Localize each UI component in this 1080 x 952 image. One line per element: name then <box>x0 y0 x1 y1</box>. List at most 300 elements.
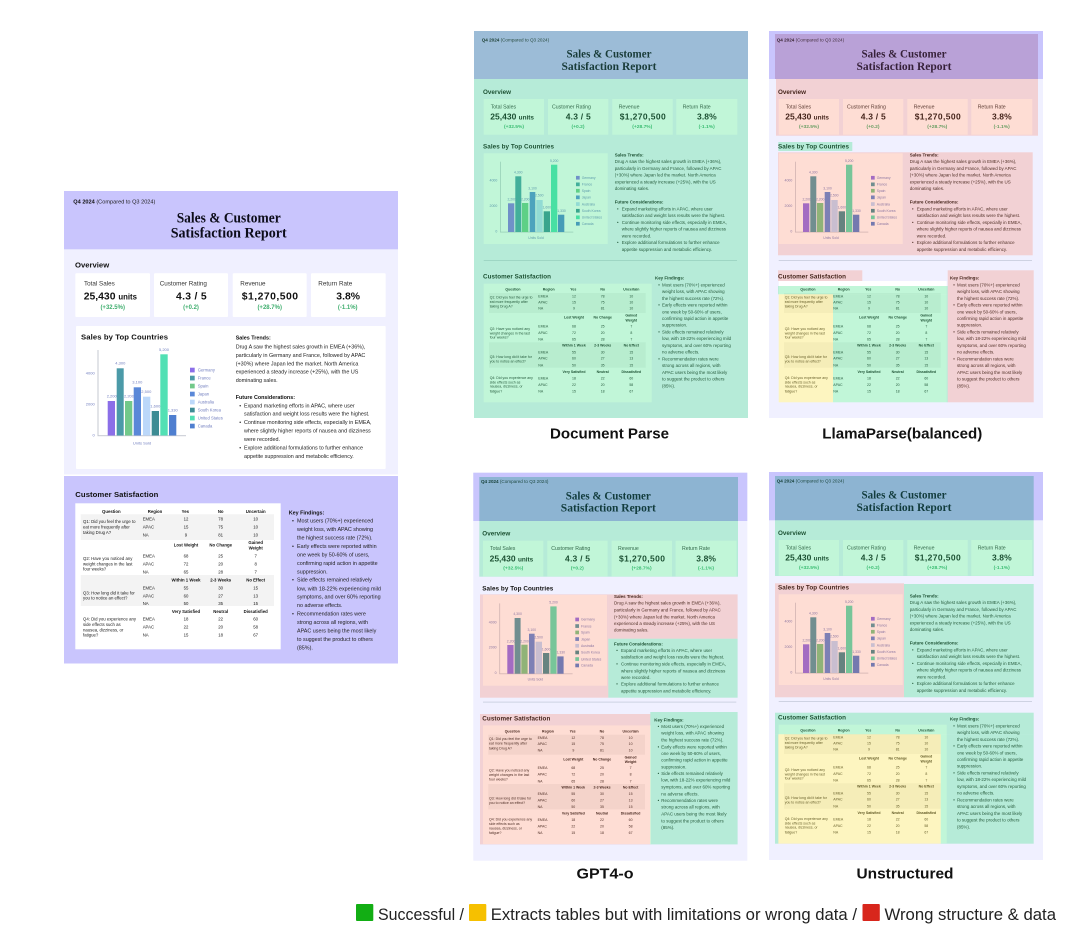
KPI cards: 4.3 / 5 <box>565 553 590 563</box>
bar chart <box>483 595 607 686</box>
satisfaction table: 22 <box>218 617 224 622</box>
satisfaction table: No Change <box>888 757 907 761</box>
future considerations text: • <box>912 647 914 652</box>
satisfaction table: 13 <box>924 357 928 361</box>
date line: Q4 2024 (Compared to Q3 2024) <box>777 478 845 483</box>
KPI cards: (+0.2) <box>867 565 880 571</box>
satisfaction table: 18 <box>572 376 576 380</box>
satisfaction table: EMEA <box>538 324 549 328</box>
bar chart: Units Sold <box>528 236 544 240</box>
satisfaction table: 81 <box>896 748 900 752</box>
report title <box>561 488 656 515</box>
sales trends text: experienced a steady increase (+25%), with the US <box>236 370 359 376</box>
bar chart: 2,500 <box>830 635 839 639</box>
satisfaction table: 50 <box>867 804 871 808</box>
satisfaction table: nausea, dizziness, or <box>83 627 124 632</box>
satisfaction table: 35 <box>896 363 900 367</box>
satisfaction table: 27 <box>218 593 224 598</box>
header band <box>474 31 748 79</box>
key findings text: low, with 18-22% experiencing mild <box>957 777 1027 782</box>
satisfaction table: Q2: Have you noticed any <box>785 327 825 331</box>
satisfaction table: 20 <box>600 773 604 777</box>
key findings text <box>655 276 732 388</box>
future considerations text: where slightly higher reports of nausea and dizziness <box>917 668 1022 673</box>
satisfaction table: 15 <box>571 831 575 835</box>
KPI cards: (+0.2) <box>571 566 584 572</box>
satisfaction table: Question <box>800 288 816 292</box>
bar chart: 4,300 <box>809 611 818 615</box>
satisfaction table: fatigue? <box>489 831 502 835</box>
satisfaction table: Neutral <box>596 812 608 816</box>
bar chart: 4000 <box>490 179 497 183</box>
key findings text: low, with 18-22% experiencing mild <box>297 586 381 592</box>
key findings text: (85%). <box>661 825 674 830</box>
sales trends text: particularly in Germany and France, followed by APAC <box>910 166 1017 171</box>
future considerations text: were recorded. <box>917 233 946 238</box>
satisfaction table: 15 <box>184 524 189 529</box>
report date line: Q4 2024 (Compared to Q3 2024) <box>73 199 156 205</box>
key findings text: suppression. <box>957 323 982 328</box>
page background <box>769 31 1043 418</box>
panel: Unstructured result <box>769 472 1043 860</box>
satisfaction table: 60 <box>572 357 576 361</box>
KPI cards: Customer Rating <box>551 546 590 552</box>
bar chart: 2,200 <box>520 639 529 643</box>
KPI cards <box>779 540 1032 576</box>
satisfaction table: 25 <box>896 765 900 769</box>
satisfaction table: APAC <box>538 742 547 746</box>
satisfaction table: Neutral <box>597 370 609 374</box>
satisfaction table: nausea, dizziness, or <box>490 385 523 389</box>
satisfaction table: Dissatisfied <box>621 370 641 374</box>
satisfaction table: NA <box>143 532 149 537</box>
report title: Sales & Customer <box>862 488 947 502</box>
bar chart: Units Sold <box>823 677 839 681</box>
future considerations text: • <box>912 240 914 245</box>
satisfaction table: 50 <box>572 363 576 367</box>
bar chart: South Korea <box>877 650 896 654</box>
satisfaction table: side effects such as <box>785 821 816 825</box>
sales trends text: particularly in Germany and France, followed by APAC <box>910 607 1017 612</box>
satisfaction table: 25 <box>896 324 900 328</box>
key findings text: • <box>658 282 660 287</box>
bar chart: 5,200 <box>550 159 559 163</box>
legend <box>356 904 1057 924</box>
key findings text: no adverse effects. <box>661 791 699 796</box>
satisfaction table: Lost Weight <box>859 316 880 320</box>
key findings text: Side effects remained relatively <box>957 770 1019 775</box>
bar chart: sales by country: Australia <box>198 400 215 404</box>
satisfaction table: Region <box>542 729 554 733</box>
future considerations text: were recorded. <box>917 674 946 679</box>
bar chart: sales by country: 2000 <box>86 401 95 406</box>
satisfaction table: you to notice an effect? <box>785 359 821 363</box>
future considerations text: satisfaction and weight loss results were the highest. <box>917 654 1020 659</box>
key findings text: Side effects remained relatively <box>957 329 1019 334</box>
satisfaction table: you to notice an effect? <box>83 596 128 601</box>
KPI cards: Customer Rating <box>847 545 886 551</box>
satisfaction table: taking Drug A? <box>785 746 808 750</box>
key findings text: Key Findings: <box>289 510 325 516</box>
satisfaction table: NA <box>143 601 149 606</box>
key findings text: • <box>658 744 660 749</box>
key findings text: • <box>658 303 660 308</box>
satisfaction table: 28 <box>600 779 604 783</box>
satisfaction table: 10 <box>253 524 259 529</box>
satisfaction table: 2-3 Weeks <box>889 344 906 348</box>
satisfaction table: 50 <box>867 363 871 367</box>
satisfaction table: EMEA <box>538 818 548 822</box>
satisfaction table: 7 <box>925 765 927 769</box>
KPI cards: (+28.7%) <box>632 124 653 130</box>
bar chart: sales by country: 0 <box>92 432 95 437</box>
KPI cards: Total Sales <box>490 546 516 552</box>
satisfaction table: Yes <box>570 729 576 733</box>
key findings text: low, with 18-22% experiencing mild <box>661 778 731 783</box>
overview heading: Overview <box>482 531 510 538</box>
bar chart <box>484 153 608 244</box>
bar chart: sales by country: France <box>198 376 211 380</box>
key findings text: no adverse effects. <box>957 350 994 355</box>
key findings text: • <box>292 611 294 617</box>
satisfaction table: Q1: Did you feel the urge to <box>785 736 828 740</box>
satisfaction table: nausea, dizziness, or <box>785 826 818 830</box>
satisfaction table: 2-3 Weeks <box>593 785 611 789</box>
panel: Document Parse result <box>474 31 748 418</box>
satisfaction table <box>779 725 947 843</box>
satisfaction table: 72 <box>867 331 871 335</box>
satisfaction table: 22 <box>867 824 871 828</box>
overview heading: Overview <box>483 89 511 96</box>
future considerations text: Future Considerations: <box>910 641 959 646</box>
satisfaction table: 55 <box>571 792 575 796</box>
satisfaction table: NA <box>538 748 543 752</box>
satisfaction table: 2-3 Weeks <box>889 785 906 789</box>
future considerations text: • <box>617 206 619 211</box>
future considerations text <box>614 641 726 694</box>
satisfaction table: APAC <box>538 300 548 304</box>
overview KPI cards: (-1.1%) <box>338 305 358 311</box>
satisfaction table: 10 <box>629 300 633 304</box>
satisfaction table: 75 <box>601 300 605 304</box>
satisfaction table: 15 <box>867 741 871 745</box>
satisfaction table: 35 <box>218 601 224 606</box>
sales trends text: dominating sales. <box>236 378 278 384</box>
customer satisfaction section background <box>64 476 398 664</box>
overview KPI cards: 25,430 units <box>84 291 138 302</box>
satisfaction table: APAC <box>833 300 843 304</box>
key findings text: one week by 50-60% of users, <box>957 750 1017 755</box>
bar chart: Canada <box>582 222 594 226</box>
satisfaction table: 27 <box>600 798 604 802</box>
satisfaction table: 68 <box>571 766 575 770</box>
sales trends text <box>614 594 722 633</box>
satisfaction table: Very Satisfied <box>172 609 200 614</box>
satisfaction table: Yes <box>570 288 576 292</box>
key findings text: APAC users being the most likely <box>297 628 377 634</box>
satisfaction table: 10 <box>629 294 633 298</box>
bar chart: 1,600 <box>542 647 550 651</box>
satisfaction table: 68 <box>184 554 189 559</box>
satisfaction table: Within 1 Week <box>857 344 881 348</box>
key findings text: (85%). <box>297 645 313 651</box>
satisfaction table: Yes <box>865 729 871 733</box>
bar chart: Germany <box>582 176 596 180</box>
satisfaction table: Q1: Did you feel the urge to <box>785 295 828 299</box>
satisfaction table: eat more frequently after <box>489 742 528 746</box>
satisfaction table: 28 <box>896 338 900 342</box>
future considerations text: • <box>912 220 914 225</box>
bar chart: 3,100 <box>823 186 832 190</box>
satisfaction table: Q4: Did you experience any <box>489 818 532 822</box>
key findings text: suppression. <box>957 764 982 769</box>
satisfaction table: Yes <box>182 509 190 514</box>
satisfaction table: side effects such as <box>490 380 521 384</box>
key findings text: APAC users being the most likely <box>957 811 1023 816</box>
future considerations text: Expand marketing efforts in APAC, where user <box>917 206 1008 211</box>
satisfaction table: 10 <box>629 736 633 740</box>
key findings text: Most users (70%+) experienced <box>297 519 373 525</box>
satisfaction table: Lost Weight <box>564 316 585 320</box>
sales trends text: (+30%) where Japan led the market. North America <box>615 173 716 178</box>
bar chart: sales by country: 5,200 <box>159 347 170 352</box>
satisfaction table: Very Satisfied <box>562 812 585 816</box>
future considerations text: Explore additional formulations to further enhance <box>917 240 1015 245</box>
satisfaction table: 12 <box>867 294 871 298</box>
bar chart: Japan <box>581 637 590 641</box>
satisfaction table: 8 <box>255 562 258 567</box>
satisfaction table: side effects such as <box>83 622 121 627</box>
bar chart: 1,600 <box>838 647 846 651</box>
bar chart: 5,200 <box>549 601 558 605</box>
satisfaction table: 58 <box>629 825 633 829</box>
bar chart: South Korea <box>582 209 601 213</box>
satisfaction table: 72 <box>867 772 871 776</box>
key findings text: symptoms, and over 60% reporting <box>957 784 1026 789</box>
satisfaction table <box>484 284 652 402</box>
satisfaction table: taking Drug A? <box>785 305 808 309</box>
satisfaction table: Q2: Have you noticed any <box>83 556 133 561</box>
satisfaction table: NA <box>833 389 839 393</box>
KPI cards: 4.3 / 5 <box>861 553 886 563</box>
KPI cards: $1,270,500 <box>619 553 665 563</box>
bar chart: sales by country: 2,500 <box>141 389 152 394</box>
satisfaction table: weight changes in the last <box>785 772 825 776</box>
overlay: detection regions <box>775 476 1034 844</box>
bar chart: United States <box>877 657 897 661</box>
sales trends text: particularly in Germany and France, followed by APAC <box>615 166 722 171</box>
overview heading: Overview <box>75 260 109 269</box>
overlay: detection regions <box>479 477 738 844</box>
satisfaction table: Uncertain <box>246 509 266 514</box>
future considerations text: where slightly higher reports of nausea and dizziness <box>622 227 727 232</box>
key findings text: strong across all regions, with <box>297 620 368 626</box>
satisfaction table: 68 <box>572 324 576 328</box>
key findings text: Recommendation rates were <box>297 611 366 617</box>
satisfaction table: Question <box>505 729 520 733</box>
KPI cards: (+0.2) <box>867 124 880 130</box>
satisfaction table: Lost Weight <box>859 757 880 761</box>
satisfaction table: 15 <box>629 350 633 354</box>
bar chart: sales by country: 4,300 <box>115 361 126 366</box>
satisfaction table: 20 <box>218 625 224 630</box>
KPI cards: Revenue <box>618 546 639 552</box>
customer satisfaction heading: Customer Satisfaction <box>778 274 846 281</box>
KPI cards: Revenue <box>914 545 935 551</box>
bar chart: 2,500 <box>830 194 839 198</box>
future considerations text <box>615 200 727 252</box>
bar chart: Canada <box>877 222 889 226</box>
satisfaction table: APAC <box>143 593 154 598</box>
satisfaction table: 81 <box>601 307 605 311</box>
bar chart: Japan <box>877 637 886 641</box>
future considerations text: Future Considerations: <box>236 395 295 401</box>
future considerations text: • <box>617 220 619 225</box>
bar chart: France <box>582 183 592 187</box>
bar chart: 1,600 <box>838 206 846 210</box>
key findings text: • <box>292 578 294 584</box>
satisfaction table: EMEA <box>143 617 155 622</box>
future considerations text: satisfaction and weight loss results were the highest. <box>917 213 1020 218</box>
key findings text: Side effects remained relatively <box>662 329 724 334</box>
bar chart: 4000 <box>785 179 792 183</box>
bar chart: 4,300 <box>513 612 522 616</box>
overview KPI cards: 3.8% <box>336 291 360 302</box>
KPI cards: Total Sales <box>786 104 811 110</box>
key findings text: the highest success rate (72%). <box>957 296 1019 301</box>
bar chart <box>779 153 903 244</box>
satisfaction table: four weeks? <box>785 777 804 781</box>
key findings text: Recommendation rates were <box>957 797 1014 802</box>
satisfaction table: 15 <box>571 742 575 746</box>
satisfaction table: 58 <box>924 824 928 828</box>
satisfaction table: 60 <box>867 798 871 802</box>
satisfaction table: four weeks? <box>489 777 508 781</box>
bar chart: Germany <box>877 176 891 180</box>
satisfaction table: 10 <box>629 742 633 746</box>
satisfaction table: fatigue? <box>83 633 99 638</box>
overview KPI cards: $1,270,500 <box>242 291 298 302</box>
satisfaction table: 15 <box>629 805 633 809</box>
satisfaction table: 22 <box>600 818 604 822</box>
satisfaction table: 22 <box>601 376 605 380</box>
satisfaction table: 15 <box>253 601 259 606</box>
satisfaction table: 13 <box>253 593 259 598</box>
bar chart: 0 <box>790 230 792 234</box>
sales trends text: dominating sales. <box>910 186 944 191</box>
satisfaction table: 13 <box>629 357 633 361</box>
key findings text: strong across all regions, with <box>662 363 721 368</box>
bar chart: South Korea <box>581 651 600 655</box>
sales trends text: Drug A saw the highest sales growth in EMEA (+36%), <box>614 601 721 606</box>
bar chart: 1,330 <box>557 651 565 655</box>
satisfaction table: 22 <box>572 383 576 387</box>
sales panel card <box>76 326 386 469</box>
satisfaction table: 15 <box>572 389 576 393</box>
future considerations text: Future Considerations: <box>614 641 663 646</box>
satisfaction table: EMEA <box>833 765 844 769</box>
key findings text: one week by 50-60% of users, <box>662 309 722 314</box>
key findings text: • <box>953 303 955 308</box>
report title <box>171 210 287 242</box>
bar chart: 1,330 <box>852 650 861 654</box>
overview KPI cards: Return Rate <box>318 280 353 287</box>
bar chart: Units Sold <box>823 236 839 240</box>
bar chart: Japan <box>582 196 591 200</box>
satisfaction table: Neutral <box>892 811 904 815</box>
satisfaction table: side effects such as <box>785 380 816 384</box>
satisfaction table: 9 <box>572 748 574 752</box>
satisfaction table: Weight <box>920 759 933 763</box>
satisfaction table: Q2: Have you noticed any <box>490 327 530 331</box>
satisfaction table: four weeks? <box>785 336 804 340</box>
KPI cards: 3.8% <box>992 112 1012 122</box>
sales trends text: particularly in Germany and France, followed by APAC <box>614 608 722 613</box>
satisfaction table: Q3: How long did it take for <box>490 355 533 359</box>
future considerations text: • <box>617 240 619 245</box>
KPI cards: (+32.5%) <box>504 124 524 130</box>
satisfaction table: eat more frequently after <box>785 300 824 304</box>
bar chart: 2,500 <box>534 635 543 639</box>
KPI cards: $1,270,500 <box>915 553 961 563</box>
sales trends text: dominating sales. <box>910 627 944 632</box>
customer satisfaction heading: Customer Satisfaction <box>75 490 159 499</box>
bar chart: Spain <box>877 630 885 634</box>
satisfaction table: you to notice an effect? <box>489 801 525 805</box>
satisfaction table: weight changes in the last <box>490 331 530 335</box>
key findings text: • <box>953 329 955 334</box>
overview KPI cards: Revenue <box>240 280 266 287</box>
sales heading: Sales by Top Countries <box>778 144 849 151</box>
caption: Document Parse: Document Parse <box>550 426 669 442</box>
satisfaction table: No Change <box>209 543 233 548</box>
satisfaction table: 13 <box>629 798 633 802</box>
satisfaction table: APAC <box>833 357 843 361</box>
satisfaction table: 67 <box>629 389 633 393</box>
bar chart: 2,200 <box>521 198 530 202</box>
date line: Q4 2024 (Compared to Q3 2024) <box>481 479 549 484</box>
key findings text: symptoms, and over 60% reporting <box>661 785 731 790</box>
satisfaction table: 9 <box>868 748 870 752</box>
satisfaction table: Q4: Did you experience any <box>83 616 137 621</box>
satisfaction table: 78 <box>601 294 605 298</box>
satisfaction table: NA <box>833 779 839 783</box>
satisfaction table: NA <box>143 633 149 638</box>
icon: yellow square <box>469 904 486 921</box>
KPI cards: 25,430 units <box>490 112 534 122</box>
key findings text: strong across all regions, with <box>957 804 1016 809</box>
key findings text: confirming rapid action in appetite <box>957 757 1024 762</box>
overview KPI cards: 4.3 / 5 <box>176 291 207 302</box>
satisfaction table: 9 <box>185 532 188 537</box>
satisfaction table: eat more frequently after <box>490 300 529 304</box>
KPI cards: 3.8% <box>696 553 716 563</box>
future considerations text: Explore additional formulations to further enhance <box>622 240 720 245</box>
satisfaction table: Within 1 Week <box>171 577 201 582</box>
satisfaction table: EMEA <box>143 554 155 559</box>
satisfaction table: EMEA <box>143 517 155 522</box>
satisfaction table: No <box>600 729 604 733</box>
key findings text: low, with 18-22% experiencing mild <box>957 336 1027 341</box>
key findings text: • <box>953 744 955 749</box>
future considerations text: appetite suppression and metabolic efficiency. <box>244 454 354 460</box>
bar chart: 1,330 <box>852 209 861 213</box>
key findings text: APAC users being the most likely <box>957 370 1023 375</box>
sales trends text: Drug A saw the highest sales growth in EMEA (+36%), <box>910 159 1016 164</box>
key findings text: Recommendation rates were <box>662 356 719 361</box>
satisfaction table: taking Drug A? <box>490 305 513 309</box>
satisfaction table: 60 <box>924 817 928 821</box>
